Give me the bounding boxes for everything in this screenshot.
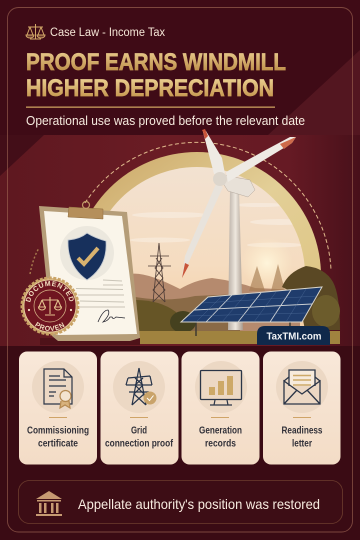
icon: open envelope [284, 370, 320, 404]
card: generation records: records [205, 438, 236, 450]
trees [282, 266, 340, 330]
signature [98, 310, 125, 322]
title [26, 49, 286, 102]
outcome text: Appellate authority's position was restored [78, 496, 320, 512]
mountains [130, 274, 300, 344]
icon: pylon [148, 243, 171, 302]
document lines [76, 280, 125, 307]
subtitle: Operational use was proved before the relevant date [26, 113, 305, 128]
card: readiness letter [263, 352, 340, 464]
seal: documented proven: PROVEN [34, 322, 65, 331]
card: grid connection proof: connection proof [105, 438, 174, 450]
icon: scales [26, 24, 45, 39]
card: readiness letter: letter [292, 438, 312, 450]
icon: pylon with check [126, 368, 156, 405]
header [26, 24, 305, 128]
clip [68, 207, 103, 219]
wind turbine [182, 129, 296, 330]
evidence cards [19, 352, 340, 464]
card: grid connection proof: Grid [131, 426, 147, 436]
gold arch [73, 152, 321, 340]
clipboard [39, 202, 140, 341]
clipboard shadow [40, 338, 140, 345]
card: readiness letter: Readiness [282, 426, 323, 436]
card: commissioning certificate: Commissioning [27, 426, 89, 436]
title: HIGHER DEPRECIATION [26, 75, 274, 102]
badge: TaxTMI.com [257, 326, 330, 345]
landscape [110, 167, 305, 326]
icon: courthouse [36, 491, 62, 516]
seal: documented proven: DOCUMENTED [26, 281, 74, 302]
icon: monitor chart [200, 370, 242, 405]
card: commissioning certificate: certificate [38, 438, 78, 450]
dashed ring [85, 142, 331, 270]
scene background [0, 135, 360, 346]
solar panels [181, 287, 322, 336]
illustration: wind and solar scene [20, 129, 340, 345]
card: generation records: Generation [199, 426, 242, 436]
header background [0, 0, 360, 135]
icon: certificate document [44, 369, 72, 408]
badge: TaxTMI.com: TaxTMI.com [266, 332, 322, 342]
card: commissioning certificate [19, 352, 97, 464]
card: grid connection proof [100, 352, 178, 464]
title: PROOF EARNS WINDMILL [26, 49, 286, 76]
seal: documented proven [20, 276, 80, 336]
card: generation records [182, 352, 260, 464]
icon: shield with check [60, 226, 114, 280]
category label: Case Law - Income Tax [50, 27, 165, 39]
outcome banner [18, 480, 342, 524]
